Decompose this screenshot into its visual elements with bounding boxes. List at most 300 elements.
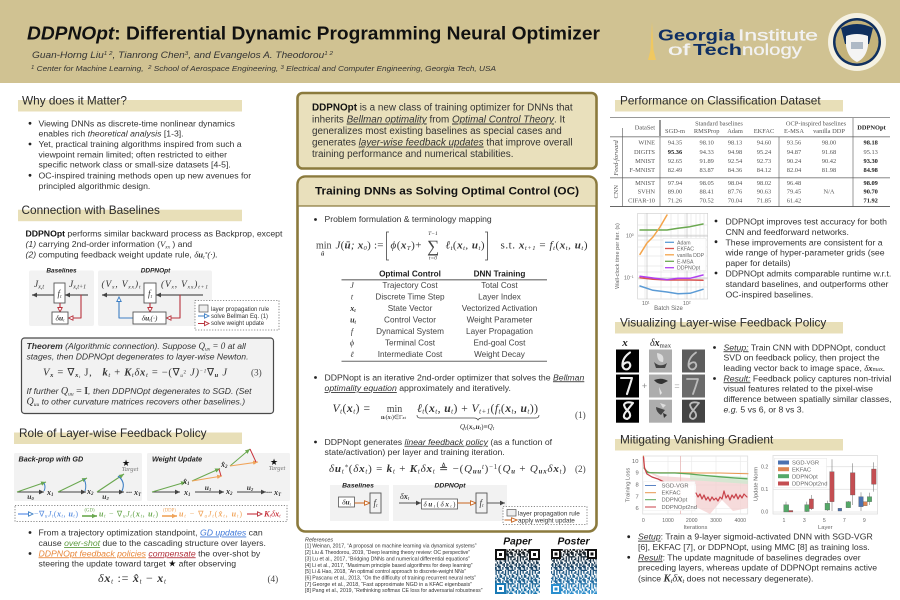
panel: DDPNOpt summary: DDPNOpt is a new class of training optimizer for DNNs that xyxy=(312,103,573,114)
Georgia Tech logo: nology xyxy=(742,42,802,59)
references: References xyxy=(305,538,333,544)
table: terminology mapping: Dynamical System xyxy=(376,327,444,336)
bullet list: performance xyxy=(715,217,891,299)
theorem box: u xyxy=(180,374,183,379)
diagram: Back-prop with GD: Target xyxy=(122,466,139,473)
diagram: DDPNOpt backward process: ) xyxy=(134,279,138,290)
diagram: DDPNOpt forward: t xyxy=(482,504,484,509)
equation: OC objective: ℓ xyxy=(446,240,450,252)
diagram: DDPNOpt forward xyxy=(393,482,507,521)
legend: vector colours: t xyxy=(52,514,54,520)
diagram: DDPNOpt forward: δu xyxy=(424,500,432,508)
authors: 1 2 xyxy=(324,51,333,57)
diagram: DDPNOpt forward: ) xyxy=(453,500,456,508)
legend: vector colours: t xyxy=(130,514,132,520)
diagram: Baselines backprop: t xyxy=(60,295,62,300)
legend: forward diagram: apply weight update xyxy=(518,518,575,524)
legend: vector colours: x̂ xyxy=(217,510,222,518)
equation: OC objective: = xyxy=(536,240,549,252)
references: [6] Pascanu et al., 2013, “On the difficulty of training recurrent neural nets” xyxy=(305,576,476,582)
legend: vector colours: ) xyxy=(155,510,158,518)
heading: Why does it Matter: Why does it Matter? xyxy=(22,94,127,108)
theorem box: 2 xyxy=(184,370,187,376)
theorem box: = −(∇ xyxy=(148,368,181,378)
equation: OC objective: ( xyxy=(453,240,457,252)
equation 2: feedback policy: K xyxy=(409,463,418,475)
chart: wall-clock time vs batch size: DDPNOpt xyxy=(677,266,701,272)
equation: OC objective: f xyxy=(549,240,553,252)
equation 2: feedback policy: δ xyxy=(421,463,427,475)
equation: OC objective: ) := xyxy=(367,240,384,252)
table: terminology mapping: DNN Training xyxy=(474,270,525,278)
bullet list: role of feedback policy: cause over-shot due to the cascading structure over layers. xyxy=(38,538,266,548)
bullet: linear feedback policy: DDPNopt generates linear feedback policy (as a function of xyxy=(324,437,553,447)
bullet: Bellman optimality: optimality equation approximately and iteratively. xyxy=(324,383,511,393)
diagram: Weight Update: ★ xyxy=(270,457,278,467)
equation 2: feedback policy: Q xyxy=(502,463,510,475)
chart: update norm boxplot: 0.1 xyxy=(761,487,768,493)
diagram: Baselines backprop: Baselines xyxy=(46,268,77,274)
bullet list: performance: OC-inspired baselines. xyxy=(726,289,813,299)
diagram: DDPNOpt backward process: (V xyxy=(161,280,171,290)
chart: update norm boxplot: Layer xyxy=(818,525,833,531)
table: terminology mapping xyxy=(342,270,547,361)
bullet list: vanishing gradient: does not necessary degenerate). xyxy=(684,573,813,583)
equation: OC objective: t xyxy=(463,245,465,252)
chart: wall-clock time vs batch size: vanilla DDP xyxy=(677,253,705,259)
legend: vector colours: u xyxy=(232,510,237,518)
table: classification results: 81.98 xyxy=(822,167,836,174)
diagram: Baselines forward: Baselines xyxy=(342,482,374,490)
diagram: Back-prop with GD: x xyxy=(87,487,91,496)
chart: update norm boxplot xyxy=(754,456,878,531)
theorem box: (3) xyxy=(251,368,262,378)
equation 2: feedback policy: uu xyxy=(473,468,481,476)
table: classification results: 94.60 xyxy=(757,140,771,146)
table: terminology mapping: Total Cost xyxy=(481,281,518,290)
bullet list: vanishing gradient: Result: The update magnitude of baselines degrades over xyxy=(638,552,861,562)
bullet list: vanishing gradient xyxy=(627,532,877,585)
equation 2: feedback policy: t xyxy=(433,468,436,476)
equation 1: Bellman: t xyxy=(435,408,438,416)
equation 2: feedback policy: t xyxy=(418,468,421,476)
equation 2: feedback policy: δ xyxy=(547,463,553,475)
legend: vector colours: u xyxy=(99,510,104,518)
legend: vector colours: x xyxy=(56,510,61,518)
equation: OC objective: , xyxy=(568,240,574,252)
title: DDPNOpt: Differential Dynamic Programming Neural Optimizer xyxy=(27,24,600,44)
chart: update norm boxplot: 0.0 xyxy=(761,510,768,516)
table: terminology mapping: Terminal Cost xyxy=(385,338,436,347)
diagram: Baselines forward: δu xyxy=(342,498,350,506)
table: classification results: 71.92 xyxy=(864,197,878,204)
theorem box: V xyxy=(43,368,49,378)
diagram: Back-prop with GD: 0 xyxy=(31,496,34,501)
theorem box: δ xyxy=(134,368,140,378)
text: connection paragraph: (1) carrying 2nd-order information (V xyxy=(26,239,165,249)
legend: vector colours: ) xyxy=(75,510,78,518)
diagram: DDPNOpt backward process: t+1 xyxy=(198,284,208,290)
equation: OC objective: x xyxy=(456,240,463,252)
table: terminology mapping: Layer Propagation xyxy=(466,327,533,336)
legend: vector colours: u xyxy=(148,510,153,518)
legend: vector colours: −∇ xyxy=(34,510,45,518)
table: classification results: RMSProp xyxy=(694,128,719,135)
table: classification results: 82.04 xyxy=(787,167,802,174)
bullet list: feedback visualization: SVD on feedback policy, then project the xyxy=(724,353,880,363)
equation 4: (4) xyxy=(268,574,278,584)
table: classification results: Standard baselines xyxy=(695,120,743,128)
QR code: Poster xyxy=(551,536,597,594)
equation: OC objective: ( xyxy=(556,240,560,252)
chart: training loss: SGD-VGR xyxy=(662,483,689,489)
legend: vector colours: u xyxy=(123,514,126,520)
equation 1: Bellman: t xyxy=(499,408,502,416)
authors: 1 2 xyxy=(104,51,113,57)
table: classification results: 70.04 xyxy=(728,197,743,204)
equation 2: feedback policy: + xyxy=(396,463,409,475)
table: classification results xyxy=(610,118,890,206)
bullet list: performance: DDPNOpt admits comparable runtime w.r.t. xyxy=(726,269,891,279)
bullet: linear feedback policy: state/activation) per layer and training iteration. xyxy=(324,447,505,457)
diagram: Weight Update: u xyxy=(205,483,209,492)
diagram: Weight Update: 2 xyxy=(229,492,233,497)
equation 1: Bellman: ) + xyxy=(454,402,471,415)
equation 1: Bellman: V xyxy=(332,402,340,415)
diagram: Baselines forward xyxy=(330,482,389,521)
table: classification results: DDPNOpt xyxy=(857,124,887,132)
table: classification results: MNIST xyxy=(635,180,655,187)
Georgia Tech logo xyxy=(648,13,886,71)
chart: update norm boxplot: DDPNOpt xyxy=(792,474,818,480)
Georgia Tech logo: of xyxy=(668,42,691,59)
table: classification results: 98.05 xyxy=(700,180,714,187)
table: classification results: SVHN xyxy=(638,188,655,196)
figure: MNIST digits and feedback: δx xyxy=(650,338,660,349)
theorem box: t xyxy=(108,372,110,379)
legend: vector colours: t xyxy=(212,514,214,520)
equation: OC objective: ∑ xyxy=(427,237,439,256)
legend: vector colours: ) xyxy=(239,510,242,518)
table: classification results: 98.02 xyxy=(757,180,771,187)
legend: vector colours: ( xyxy=(215,510,218,518)
diagram: Weight Update: x̂ xyxy=(221,460,225,469)
legend: vector colours: t xyxy=(141,514,143,520)
theorem box: u xyxy=(215,372,219,379)
equation: OC objective: t xyxy=(566,245,568,252)
legend: vector colours: u xyxy=(45,514,48,520)
bullet list: feedback visualization: visual features related to the pixel-wise xyxy=(724,384,873,394)
bullet list: feedback visualization xyxy=(713,342,892,414)
diagram: Weight Update: 1 xyxy=(209,487,211,492)
bullet list: vanishing gradient: Setup: Train a 9-layer sigmoid-activated DNN with SGD-VGR xyxy=(638,532,873,542)
table: classification results: 98.10 xyxy=(700,140,714,146)
chart: training loss: 6 xyxy=(636,506,639,512)
theorem box: stages, then DDPNOpt degenerates to layer-wise Newton. xyxy=(26,351,248,361)
diagram: Weight Update: T xyxy=(278,493,282,498)
bullet list: vanishing gradient: t xyxy=(671,578,673,585)
table: classification results: 92.65 xyxy=(668,158,682,165)
chart: wall-clock time vs batch size: −1 xyxy=(630,275,634,279)
diagram: Back-prop with GD: x xyxy=(47,488,51,497)
legend: baselines diagram: layer propagation rule xyxy=(211,307,270,313)
table: classification results: N/A xyxy=(823,188,835,196)
legend: vector colours: t xyxy=(279,514,281,520)
table: classification results: WINE xyxy=(638,140,655,146)
table: classification results: 71.26 xyxy=(668,197,682,204)
equation 4: t xyxy=(111,578,114,586)
authors: Guan-Horng Liu xyxy=(32,50,95,60)
diagram: Back-prop with GD: u xyxy=(102,492,106,501)
table: classification results: 87.76 xyxy=(728,188,742,196)
table: terminology mapping: x xyxy=(350,304,354,313)
chart: training loss: 1000 xyxy=(662,518,674,524)
diagram: DDPNOpt forward: t xyxy=(408,497,410,502)
equation 1: Bellman: x xyxy=(504,402,511,415)
bullet list: role of feedback policy: DDPNOpt feedback policies compensate the over-shot by xyxy=(38,548,261,558)
chart: wall-clock time vs batch size: 0 xyxy=(632,233,634,237)
equation 2: feedback policy: ( xyxy=(498,463,502,475)
authors: , and Evangelos A. Theodorou xyxy=(188,50,324,60)
legend: vector colours: , xyxy=(143,510,147,518)
equation 1: Bellman: u xyxy=(476,423,480,431)
theorem box: k xyxy=(102,368,108,378)
chart: training loss: 0 xyxy=(642,518,645,524)
chart: wall-clock time vs batch size: 2 xyxy=(689,300,691,304)
equation 2: feedback policy: * xyxy=(345,464,349,472)
equation 2: feedback policy: u xyxy=(511,468,515,476)
theorem box: x xyxy=(74,372,79,379)
table: classification results: 91.68 xyxy=(822,149,836,156)
equation 1: Bellman: x xyxy=(428,402,435,415)
bullet list: role of feedback policy: From a trajectory optimization standpoint, GD updates can xyxy=(38,528,263,538)
chart: wall-clock time vs batch size: 10 xyxy=(626,234,632,240)
legend: vector colours xyxy=(15,506,287,522)
diagram: Baselines backprop xyxy=(29,268,94,326)
affiliations: School of Aerospace Engineering, xyxy=(151,66,281,73)
legend: vector colours: J xyxy=(48,510,52,518)
heading: Mitigating Vanishing Gradient xyxy=(615,432,843,450)
table: classification results: 90.42 xyxy=(822,158,836,165)
table: terminology mapping: Trajectory Cost xyxy=(382,281,438,290)
legend: vector colours: u xyxy=(204,514,207,520)
diagram: Baselines backprop: J xyxy=(34,280,38,290)
equation 2: feedback policy: ( xyxy=(349,463,353,475)
theorem box: t xyxy=(132,372,134,379)
diagram: Baselines backprop: x,t+1 xyxy=(72,284,86,290)
bullet list: feedback visualization: Result: Feedback policy captures non-trivial xyxy=(724,373,891,383)
table: terminology mapping: Layer Index xyxy=(478,292,521,302)
Georgia Tech logo: Tech xyxy=(693,42,742,59)
table: classification results: 94.33 xyxy=(700,149,714,156)
equation 4 xyxy=(98,571,278,586)
equation 1: Bellman: f xyxy=(495,402,498,415)
equation 1: Bellman: Q xyxy=(488,423,493,431)
equation 1: Bellman: ( xyxy=(466,423,469,431)
chart: training loss: 10 xyxy=(632,459,638,465)
chart: training loss: 3000 xyxy=(710,518,722,524)
chart: update norm boxplot: Update Norm xyxy=(754,467,760,501)
diagram: DDPNOpt backward process: DDPNOpt xyxy=(141,268,171,274)
figure: MNIST digits and feedback: x xyxy=(621,337,628,349)
Georgia Tech logo: Institute xyxy=(738,28,818,44)
legend: baselines diagram: solve weight update xyxy=(211,321,265,327)
diagram: DDPNOpt forward: t xyxy=(450,504,452,508)
panel: Training DNNs as Solving Optimal Control xyxy=(298,176,596,532)
equation 2: feedback policy: δx xyxy=(353,463,365,475)
diagram: Weight Update: ··· x xyxy=(266,488,278,497)
equation 4: x̂ xyxy=(132,571,139,585)
diagram: Weight Update xyxy=(147,449,290,501)
theorem box: uu xyxy=(68,392,74,398)
table: classification results: vanilla DDP xyxy=(813,128,845,135)
equation: OC objective: t xyxy=(451,245,453,252)
chart: training loss: DDPNOpt2nd xyxy=(662,505,697,511)
theorem box: Q xyxy=(26,396,34,408)
equation 1: Bellman: , xyxy=(514,402,520,415)
legend: vector colours: u xyxy=(179,510,184,518)
text: connection paragraph: (2) computing feedback weight update rule, δu xyxy=(26,250,203,260)
chart: wall-clock time vs batch size: 10 xyxy=(642,301,648,307)
equation: OC objective: T xyxy=(407,245,412,252)
bullet list: feedback visualization: leading vector back to image space, δxmax. xyxy=(724,363,885,373)
table: classification results: 98.00 xyxy=(822,140,836,146)
chart: wall-clock time vs batch size: 10 xyxy=(683,301,689,307)
equation: OC objective: u xyxy=(472,240,478,252)
chart: training loss: 9 xyxy=(636,471,639,477)
chart: training loss xyxy=(626,456,748,531)
panel: DDPNOpt summary: inherits Bellman optimality from Optimal Control Theory. It xyxy=(312,114,565,126)
table: classification results: Feed-forward xyxy=(613,140,620,177)
bullet list: feedback visualization: e.g. 5 vs 6, or 8 vs 3. xyxy=(724,404,804,414)
diagram: Back-prop with GD: ★ xyxy=(122,458,130,468)
figure: MNIST digits and feedback: = xyxy=(674,381,680,391)
equation 2: feedback policy: k xyxy=(387,463,393,475)
text: connection paragraph: t xyxy=(203,255,205,261)
table: classification results: 98.13 xyxy=(728,140,742,146)
legend: vector colours: ( xyxy=(132,510,136,518)
table: classification results: 91.89 xyxy=(700,158,714,165)
table: terminology mapping: Optimal Control xyxy=(379,270,441,278)
theorem box xyxy=(22,338,274,414)
equation 2: feedback policy: t xyxy=(365,468,368,476)
legend: vector colours: , xyxy=(63,510,68,518)
legend: vector colours: − ∇ xyxy=(187,510,204,518)
table: terminology mapping: Weight Decay xyxy=(474,350,526,359)
table: terminology mapping: t xyxy=(355,320,357,325)
diagram: Baselines backprop: δu xyxy=(56,314,63,322)
legend: vector colours: t xyxy=(237,514,239,520)
references: [8] Pang et al., 2019, “Rethinking softmax CE loss for adversarial robustness” xyxy=(305,588,483,594)
diagram: Baselines backprop: x,t xyxy=(37,284,44,290)
references: [7] George et al., 2018, “Fast approximate NGD in a KFAC eigenbasis” xyxy=(305,582,472,588)
table: classification results: 90.24 xyxy=(787,158,802,165)
legend: vector colours: t xyxy=(153,514,155,520)
equation 1: Bellman: ( xyxy=(501,402,505,415)
table: terminology mapping: t xyxy=(351,292,354,302)
equation 1: Bellman: t xyxy=(340,408,343,416)
bullet list: vanishing gradient: δ xyxy=(672,573,678,584)
authors: 3 xyxy=(185,51,189,57)
diagram: DDPNOpt forward: DDPNOpt xyxy=(435,482,466,490)
table: classification results: 83.87 xyxy=(700,167,715,174)
panel: DDPNOpt summary: generalizes most existing baselines as special cases and xyxy=(312,126,562,137)
diagram: Baselines backprop: t xyxy=(63,318,65,322)
heading: Performance on Classification Dataset: Performance on Classification Dataset xyxy=(620,94,821,108)
equation 2: feedback policy: t xyxy=(342,468,345,476)
diagram: Weight Update: x xyxy=(184,488,188,497)
bullet list: role of feedback policy: steering the update toward target ★ after observing xyxy=(38,559,236,569)
legend: vector colours: t xyxy=(73,514,75,520)
theorem box: to other curvature matrices recovers other baselines.) xyxy=(39,396,245,406)
theorem box: J xyxy=(219,368,228,378)
equation 1: Bellman: t xyxy=(465,427,467,432)
panel: DDPNOpt summary xyxy=(298,93,596,168)
equation 1: Bellman: t xyxy=(527,408,530,416)
equation 1: Bellman: u xyxy=(444,402,451,415)
equation 1: Bellman: t xyxy=(451,408,454,416)
heading: Role of Layer-wise Feedback Policy xyxy=(14,426,242,444)
equation: OC objective: s.t. x xyxy=(500,240,524,252)
table: terminology mapping: ℓ xyxy=(350,350,354,359)
equation 4: t xyxy=(164,578,167,586)
table: classification results: Adam xyxy=(727,128,743,135)
table: classification results: 79.45 xyxy=(787,188,801,196)
diagram: DDPNOpt backward process: t xyxy=(149,318,151,322)
equation 2: feedback policy: −1 xyxy=(489,464,497,471)
chart: training loss: EKFAC xyxy=(662,490,681,496)
bullet list: feedback visualization: difference between spatially similar classes, xyxy=(724,394,892,404)
table: classification results: 84.12 xyxy=(757,167,771,174)
bullet list: performance: standard baselines, and outperforms other xyxy=(726,279,889,289)
diagram: DDPNOpt backward process: (V xyxy=(102,280,111,290)
equation 2: feedback policy: ≜ −( xyxy=(436,462,464,475)
bullet: problem formulation: Problem formulation & terminology mapping xyxy=(324,214,492,224)
theorem box: at all xyxy=(228,341,246,351)
diagram: Baselines backprop: f xyxy=(58,288,60,298)
table: classification results: CNN xyxy=(613,185,620,198)
diagram: DDPNOpt forward: f xyxy=(480,498,482,508)
theorem box: x xyxy=(49,372,54,379)
legend: vector colours: t xyxy=(223,514,225,520)
references: [5] Li & Hao, 2018, “An optimal control approach to discrete-weight NNs” xyxy=(305,569,466,575)
bullet: Bellman optimality: DDPNopt is an iterative 2nd-order optimizer that solves the Bellman xyxy=(324,372,584,382)
affiliations: Electrical and Computer Engineering, Georgia Tech, USA xyxy=(284,66,496,73)
table: classification results: DIGITS xyxy=(634,149,655,156)
table: classification results: 98.04 xyxy=(728,180,743,187)
table: classification results: 88.41 xyxy=(700,188,714,196)
legend: vector colours: , xyxy=(226,510,231,518)
table: classification results: 95.13 xyxy=(864,149,878,156)
legend: vector colours: (GD) xyxy=(84,508,95,514)
diagram: Back-prop with GD: T xyxy=(138,493,142,498)
chart: update norm boxplot: 3 xyxy=(803,518,806,524)
table: classification results: 70.52 xyxy=(700,197,714,204)
QR code: Poster: Poster xyxy=(557,536,591,548)
table: classification results: 84.98 xyxy=(864,167,878,174)
legend: vector colours: t xyxy=(270,514,272,520)
chart: update norm boxplot: 7 xyxy=(843,518,846,524)
references: [1] Weinan, 2017, “A proposal on machine learning via dynamical systems” xyxy=(305,544,477,550)
legend: vector colours: J xyxy=(126,510,130,518)
diagram: DDPNOpt forward: δx xyxy=(440,500,449,508)
table: classification results: 61.42 xyxy=(787,197,801,204)
diagram: Weight Update: Weight Update xyxy=(152,454,202,464)
bullet list: vanishing gradient: t xyxy=(682,578,684,585)
equation: OC objective xyxy=(316,231,588,262)
chart: wall-clock time vs batch size: E-MSA xyxy=(677,259,694,265)
chart: training loss: Iterations xyxy=(684,525,708,531)
